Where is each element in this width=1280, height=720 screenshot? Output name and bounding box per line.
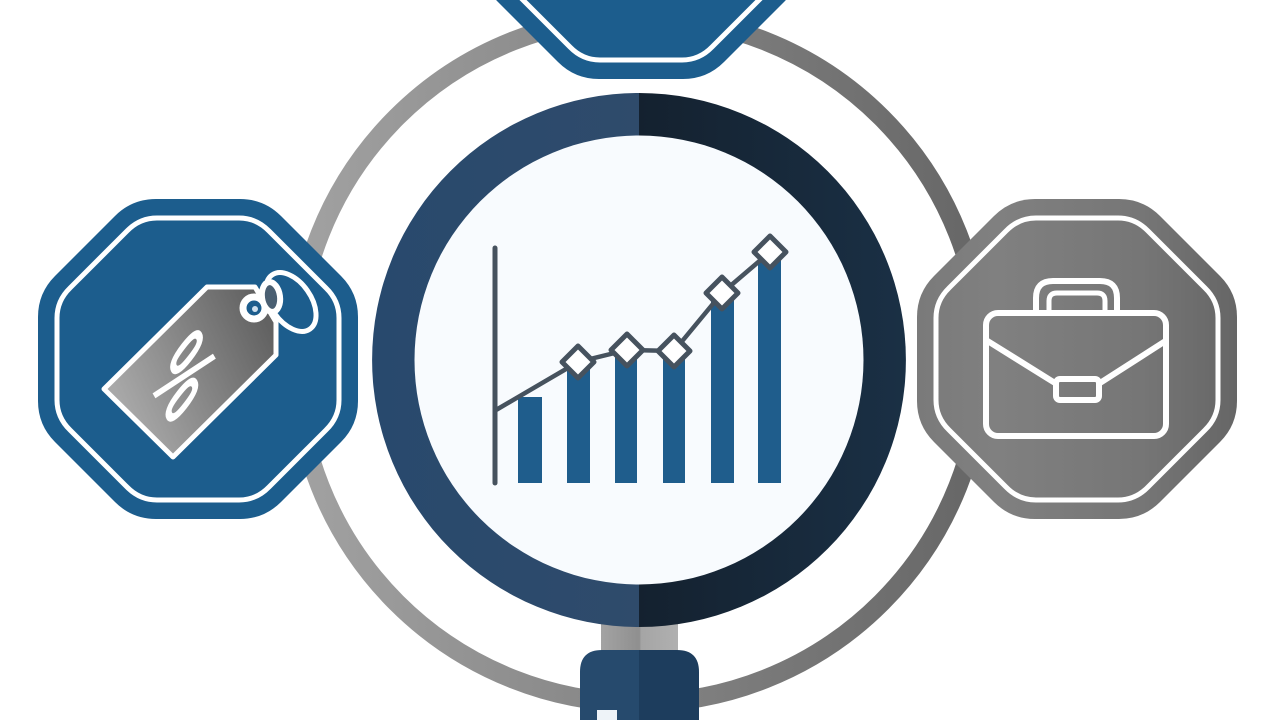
bar and line chart	[495, 236, 786, 483]
icon: briefcase	[986, 281, 1167, 436]
lens frame	[372, 93, 906, 627]
lens glass	[414, 136, 864, 584]
trend line	[496, 252, 770, 410]
octagon background	[917, 199, 1237, 519]
left octagon badge: price tag	[38, 199, 358, 519]
icon: price tag	[104, 263, 326, 457]
top octagon badge	[481, 0, 801, 79]
octagon background	[38, 199, 358, 519]
bars	[518, 258, 781, 483]
percent sign: %	[133, 304, 236, 447]
magnifying glass	[372, 93, 906, 720]
handle neck	[601, 615, 678, 655]
data markers	[562, 236, 786, 378]
outer gray ring	[296, 17, 982, 703]
handle grip	[580, 650, 699, 720]
axis	[492, 248, 498, 483]
right octagon badge: briefcase	[917, 199, 1237, 519]
